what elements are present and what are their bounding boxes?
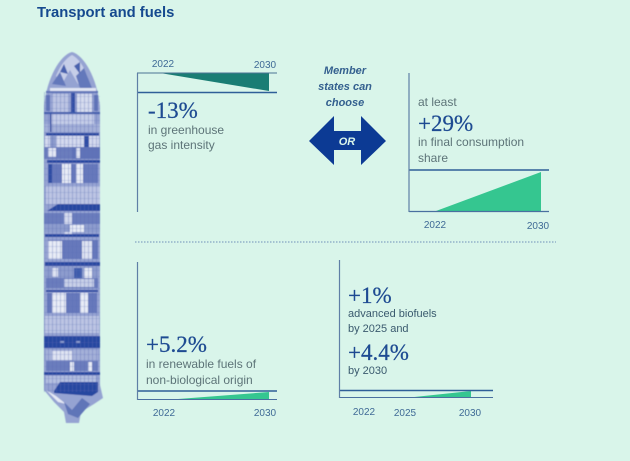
text: member states can choose: Member xyxy=(324,65,367,77)
arrow: OR double-headed: OR xyxy=(339,136,355,148)
text: +5.2% renewable fuels of non-biological origin xyxy=(146,332,257,387)
year label 2025: 2025 xyxy=(394,408,417,419)
year label 2030: 2030 xyxy=(254,408,277,419)
text: -13% in greenhouse gas intensity xyxy=(148,98,224,152)
text: +1% advanced biofuels by 2025 and +4.4% by 2030: advanced biofuels xyxy=(348,308,437,320)
year label 2030: 2030 xyxy=(254,60,277,71)
year label 2022: 2022 xyxy=(424,220,447,231)
arrow: OR double-headed xyxy=(309,116,386,165)
text: +1% advanced biofuels by 2025 and +4.4% by 2030: +4.4% xyxy=(348,340,409,365)
text: +1% advanced biofuels by 2025 and +4.4% by 2030: by 2025 and xyxy=(348,323,409,335)
text: member states can choose: choose xyxy=(326,97,364,109)
text: +5.2% renewable fuels of non-biological origin: non-biological origin xyxy=(146,373,253,387)
chart: greenhouse gas intensity xyxy=(137,59,277,212)
text: +5.2% renewable fuels of non-biological origin: in renewable fuels of xyxy=(146,357,257,371)
year label 2022: 2022 xyxy=(353,407,376,418)
year label 2030: 2030 xyxy=(459,408,482,419)
text: -13% in greenhouse gas intensity: gas intensity xyxy=(148,138,215,152)
text: +1% advanced biofuels by 2025 and +4.4% by 2030 xyxy=(348,283,437,377)
text: at least +29% in final consumption share: in final consumption xyxy=(418,135,524,149)
text: at least +29% in final consumption share: share xyxy=(418,151,448,165)
year label 2030: 2030 xyxy=(527,221,550,232)
year label 2022: 2022 xyxy=(152,59,175,70)
text: at least +29% in final consumption share: +29% xyxy=(418,111,473,136)
chart: renewable fuels of non-biological origin xyxy=(137,262,277,419)
title: Transport and fuels xyxy=(37,5,174,21)
text: +1% advanced biofuels by 2025 and +4.4% by 2030: by 2030 xyxy=(348,365,387,377)
text: +1% advanced biofuels by 2025 and +4.4% by 2030: +1% xyxy=(348,283,392,308)
text: at least +29% in final consumption share xyxy=(418,95,524,165)
text: +5.2% renewable fuels of non-biological origin: +5.2% xyxy=(146,332,207,357)
icon: container ship seen from above xyxy=(44,52,103,423)
text: member states can choose: states can xyxy=(318,81,372,93)
chart: advanced biofuels xyxy=(339,260,493,419)
text: -13% in greenhouse gas intensity: -13% xyxy=(148,98,198,123)
text: member states can choose xyxy=(318,65,372,109)
text: -13% in greenhouse gas intensity: in greenhouse xyxy=(148,123,224,137)
chart: final consumption share xyxy=(409,73,550,232)
year label 2022: 2022 xyxy=(153,408,176,419)
text: at least +29% in final consumption share: at least xyxy=(418,95,457,109)
